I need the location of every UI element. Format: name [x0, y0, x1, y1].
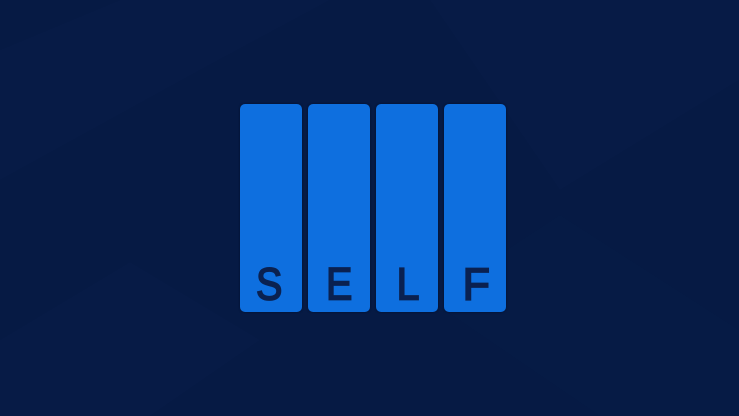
column: E [308, 104, 370, 312]
column: F [444, 104, 506, 312]
column: S [240, 104, 302, 312]
letters: SELF: E [326, 259, 352, 309]
letters: SELF: L [396, 260, 420, 310]
column: L [376, 104, 438, 312]
letters: SELF: F [462, 258, 490, 310]
letters: SELF: S [256, 259, 282, 309]
